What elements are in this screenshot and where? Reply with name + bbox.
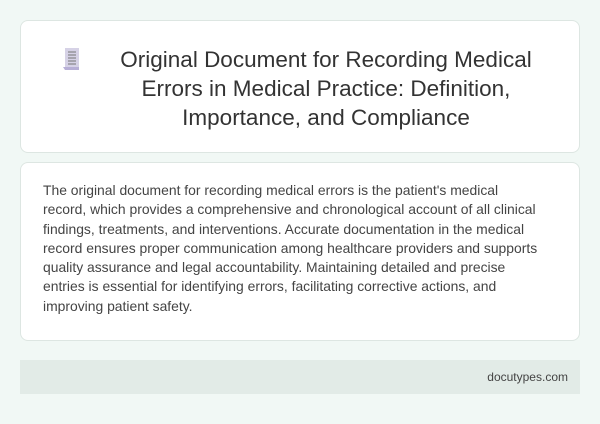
body text: quality assurance and legal accountability. Maintaining detailed and precise — [43, 259, 505, 275]
footer: docutypes.com — [487, 370, 568, 384]
footer — [20, 360, 580, 394]
body text: record ensures proper communication among healthcare providers and supports — [43, 240, 537, 256]
body text: record, which provides a comprehensive and chronological account of all clinical — [43, 201, 536, 217]
icon: document — [63, 48, 79, 70]
body text: entries is essential for identifying errors, facilitating corrective actions, and — [43, 278, 496, 294]
body text — [43, 182, 537, 314]
heading: Original Document for Recording Medical Errors in Medical Practice: Definition, Importance, and Compliance — [120, 47, 532, 130]
title card — [20, 20, 580, 153]
body text: The original document for recording medical errors is the patient's medical — [43, 182, 498, 198]
description card — [20, 162, 580, 341]
body text: findings, treatments, and interventions. Accurate documentation in the medical — [43, 221, 524, 237]
body text: improving patient safety. — [43, 298, 193, 314]
